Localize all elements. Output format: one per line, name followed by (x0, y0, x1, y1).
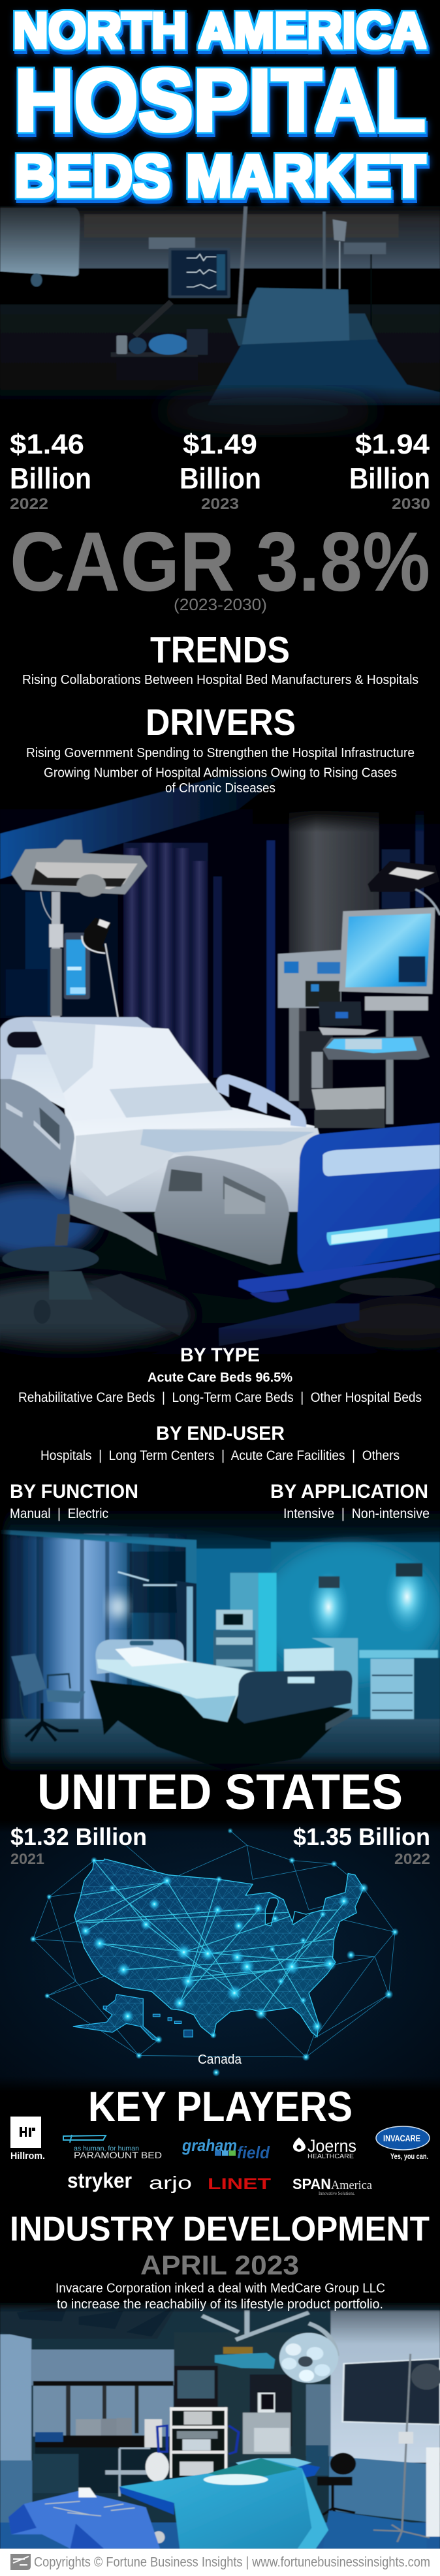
chair (11, 1654, 46, 1696)
cabinets (311, 1638, 358, 1715)
stat: US 2021 (10, 1823, 147, 1867)
photo: acute care bed and monitors (0, 777, 440, 1412)
logo: Graham Field: field (237, 2143, 270, 2162)
logo: Stryker: stryker (67, 2169, 132, 2192)
iv pole (373, 2354, 430, 2542)
stat: 2023 market size: Billion (180, 462, 261, 495)
lamp (11, 840, 148, 894)
logo: Paramount Bed: as human, for human (74, 2145, 139, 2152)
segment: by function: BY FUNCTION (10, 1481, 138, 1502)
date: April 2023: APRIL 2023 (140, 2250, 299, 2280)
footer (0, 2549, 440, 2576)
left rail (0, 1079, 74, 1200)
segment: by function: Manual | Electric (10, 1506, 108, 1521)
stat: US 2022: $1.35 Billion (293, 1823, 430, 1850)
stat: 2023 market size (180, 429, 261, 513)
stat: 2030 market size: $1.94 (355, 429, 430, 460)
alaska and hawaii (73, 1994, 160, 2041)
segment: by type (18, 1344, 422, 1405)
segment: by application: BY APPLICATION (270, 1481, 428, 1502)
logo: Span America: Innovative Solutions. (319, 2191, 355, 2196)
photo: blue lit patient room (0, 1506, 440, 1783)
stat: 2030 market size: 2030 (392, 495, 430, 513)
segment: by function (10, 1481, 138, 1521)
left panel and under bed (69, 1214, 294, 1299)
logo: Span America: SPAN (292, 2176, 331, 2192)
industry development text: to increase the reachabiliy of its lifestyle product portfolio. (57, 2297, 383, 2312)
stat: US 2021: $1.32 Billion (10, 1823, 147, 1850)
industry development text (55, 2282, 385, 2312)
drivers text: Rising Government Spending to Strengthen the Hospital Infrastructure (26, 746, 415, 760)
title: BEDS MARKET (14, 144, 426, 209)
head board (0, 1017, 168, 1093)
operating table (119, 2462, 320, 2515)
trends text: Rising Collaborations Between Hospital Bed Manufacturers & Hospitals (22, 673, 418, 687)
stat: 2023 market size: $1.49 (183, 429, 257, 460)
front rail (154, 1156, 289, 1265)
logo: Hillrom: Hillrom. (10, 2150, 45, 2162)
central dark block (174, 2332, 331, 2462)
heading: trends: TRENDS (150, 629, 290, 671)
stat: 2022 market size: 2022 (10, 495, 48, 513)
nodes (30, 1828, 399, 2077)
logo: Joerns Healthcare: Joerns (307, 2136, 356, 2156)
instrument table (8, 2491, 160, 2549)
great lakes (265, 1898, 311, 1926)
logo: Linet: LINET (208, 2175, 271, 2193)
logo: Span America (292, 2176, 373, 2196)
logo: Invacare: Yes, you can. (390, 2152, 428, 2161)
logo: Invacare (376, 2126, 430, 2161)
stat: 2022 market size: $1.46 (10, 429, 84, 460)
floor (0, 1719, 440, 1779)
right equipment (278, 950, 341, 1008)
logo: Paramount Bed (63, 2135, 162, 2160)
anaesthesia machine (243, 2413, 291, 2454)
segment: by end-user: BY END-USER (156, 1423, 285, 1444)
outer network (33, 1831, 395, 2057)
stat: 2030 market size (349, 429, 430, 513)
blanket (76, 1127, 320, 1196)
stat: 2022 market size: Billion (10, 462, 91, 495)
pillow (32, 1021, 233, 1121)
heading: united states: UNITED STATES (37, 1764, 403, 1820)
drivers text: Growing Number of Hospital Admissions Owing to Rising Cases (44, 766, 397, 781)
segment: by end-user: Hospitals | Long Term Centers | Acute Care Facilities | Others (40, 1448, 400, 1463)
title: NORTH AMERICA (13, 3, 426, 59)
stat: 2022 market size (10, 429, 91, 513)
label: Canada: Canada (198, 2053, 242, 2067)
segment: by application: Intensive | Non-intensive (283, 1506, 430, 1521)
segment: by application (270, 1481, 430, 1521)
far rail (216, 1074, 306, 1127)
logo: Hillrom (10, 2117, 45, 2162)
stool (330, 2453, 356, 2475)
industry development text: Invacare Corporation inked a deal with MedCare Group LLC (55, 2282, 385, 2296)
drivers text (26, 746, 415, 796)
stat: US 2021: 2021 (10, 1850, 44, 1867)
title (13, 3, 426, 209)
photo: hospital bed with monitor (0, 204, 440, 416)
logo: Invacare: INVACARE (383, 2133, 420, 2143)
logo: Joerns Healthcare (293, 2136, 356, 2160)
logo: Arjo: arjo (149, 2173, 192, 2193)
stat: 2023 market size: 2023 (201, 495, 239, 513)
segment: by end-user (40, 1423, 400, 1463)
right wall (331, 2310, 440, 2462)
bed base (55, 1214, 71, 1245)
stat: US 2022: 2022 (394, 1850, 430, 1867)
segment: by type: BY TYPE (180, 1344, 260, 1366)
logo: Graham Field: graham (181, 2135, 237, 2155)
blue foot board (298, 1123, 440, 1274)
bed (95, 1639, 184, 1674)
segment: by type: Acute Care Beds 96.5% (148, 1371, 292, 1385)
logo: Span America: America (331, 2179, 373, 2192)
CAGR figure: (2023-2030) (174, 596, 267, 614)
drivers text: of Chronic Diseases (165, 781, 275, 796)
logo: Graham Field (181, 2135, 270, 2162)
map: united states network (0, 1821, 440, 2092)
stat: 2030 market size: Billion (349, 462, 430, 495)
blurred blanket reflection (157, 397, 379, 426)
icon: fortune business insights logo (10, 2554, 31, 2570)
heading: drivers: DRIVERS (146, 702, 296, 743)
photo: operating room (0, 2302, 440, 2550)
logo: Paramount Bed: PARAMOUNT BED (74, 2150, 162, 2160)
surgical light arms (202, 2310, 337, 2356)
tv and rack (174, 2366, 218, 2407)
stat: US 2022 (293, 1823, 430, 1867)
bright connection lines (76, 1861, 345, 2026)
logo: Joerns Healthcare: HEALTHCARE (307, 2153, 354, 2160)
floor (0, 1212, 440, 1412)
floor (0, 2522, 440, 2549)
heading: key players: KEY PLAYERS (88, 2083, 353, 2130)
